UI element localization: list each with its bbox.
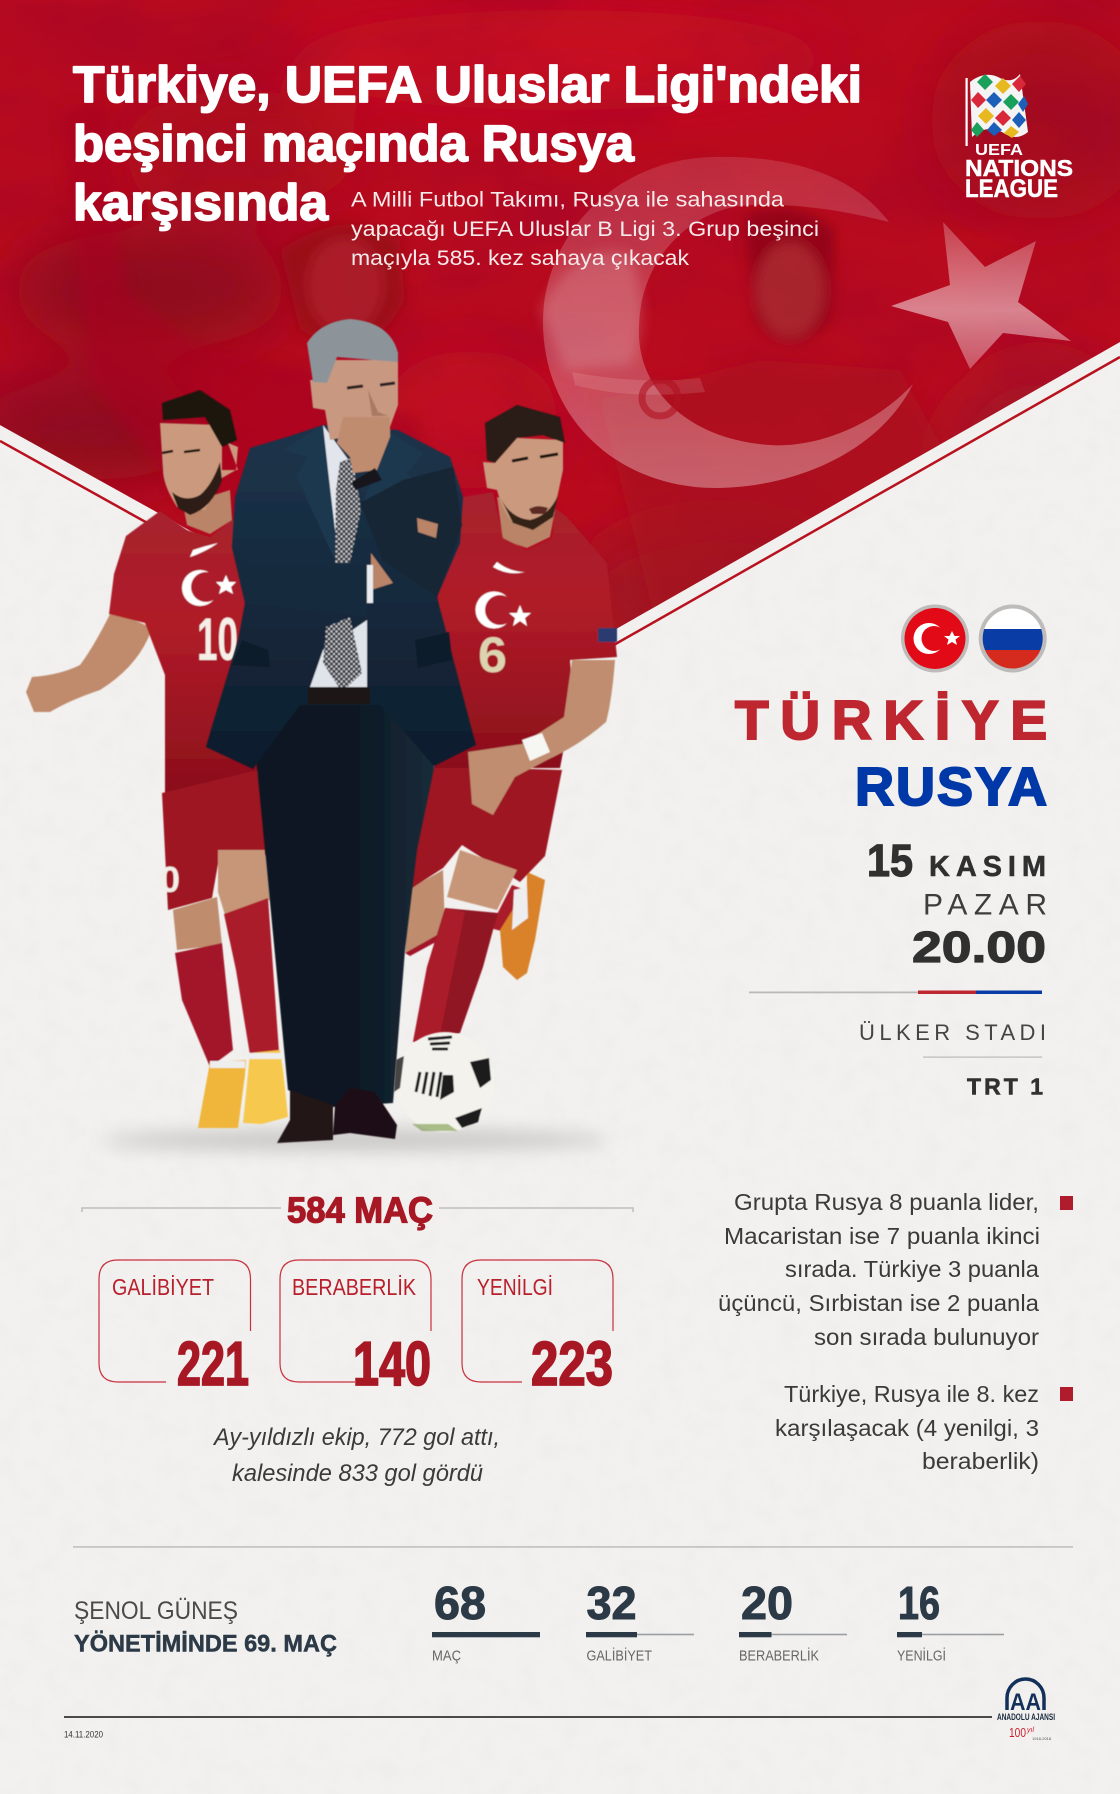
coach stat: draws: BERABERLİK [739,1647,819,1665]
group note: Grupta Rusya 8 puanla lider, [734,1189,1039,1215]
subtitle: yapacağı UEFA Uluslar B Ligi 3. Grup beşinci [351,218,819,241]
coach stat: matches: 68 [434,1577,486,1629]
jersey [434,492,617,768]
coach heading: YÖNETİMİNDE 69. MAÇ [74,1631,337,1658]
flag crescent [543,157,913,488]
coach stat: draws: 20 [741,1577,793,1629]
logo: UEFA Nations League [965,74,1073,203]
coach stat: losses: 16 [898,1577,940,1629]
flag star [891,222,1071,369]
head-to-head note: Türkiye, Rusya ile 8. kez [784,1381,1039,1407]
logo: UEFA Nations League: NATIONS [965,155,1073,181]
title: beşinci maçında Rusya [73,115,635,172]
head-to-head note [775,1381,1073,1474]
front leg [447,850,517,910]
coach stat: wins [586,1577,694,1665]
neck and head [483,405,565,548]
stat card: yenilgi: 223 [531,1330,613,1399]
match date and time: KASIM [929,851,1046,883]
coach heading: ŞENOL GÜNEŞ [74,1597,238,1625]
logo: Anadolu Ajansı: ANADOLU AJANSI [997,1712,1055,1722]
stat card: galibiyet: 221 [177,1330,249,1399]
coach stat: wins: GALİBİYET [586,1647,652,1665]
coach stat: draws [739,1577,847,1665]
goals note: kalesinde 833 gol gördü [232,1460,483,1487]
subtitle [351,188,819,270]
head-to-head note: karşılaşacak (4 yenilgi, 3 [775,1415,1039,1441]
jersey [109,511,262,795]
faded crowd players [74,140,944,610]
shoes [277,1090,333,1143]
shorts [406,766,562,892]
watch [352,468,382,490]
goals note: Ay-yıldızlı ekip, 772 gol attı, [212,1424,500,1451]
boots [198,1060,246,1128]
head [160,390,238,534]
photo: player number 6: 6 [478,627,507,683]
broadcaster: TRT 1 [967,1074,1043,1100]
all-time record heading [82,1190,633,1231]
tri-colour divider [749,990,1042,994]
coach stat: wins: 32 [586,1577,636,1629]
match date and time: 20.00 [912,923,1046,972]
title [73,56,862,231]
diagonal red rule right [612,357,1120,646]
stat card: beraberlik [280,1260,431,1399]
arm left [26,610,152,712]
legs [173,897,222,950]
photo: coach Şenol Güneş [206,319,476,1143]
photo: player number 10: 0 [160,859,180,900]
coach stat: matches [432,1577,540,1665]
photo: player number 10: 10 [197,606,238,673]
match date and time: PAZAR [923,888,1047,922]
photo: player number 10 [26,390,288,1128]
venue: ÜLKER STADI [859,1020,1046,1045]
photo: player number 6 [405,405,617,1042]
boot [500,872,545,980]
head [307,319,398,473]
trousers [250,695,440,1107]
coach stat: matches: MAÇ [432,1649,461,1665]
bullet [1060,1387,1073,1401]
pockets [232,640,270,667]
stat card: beraberlik: 140 [353,1330,431,1399]
shirt [310,425,367,687]
coach stat: losses [897,1577,1004,1665]
logo: Anadolu Ajansı: yıl [1026,1727,1034,1734]
subtitle: A Milli Futbol Takımı, Rusya ile sahasında [351,188,784,212]
icon: Turkey flag [901,604,969,672]
arm [468,660,615,815]
flags [901,604,1047,674]
subtitle: maçıyla 585. kez sahaya çıkacak [351,247,690,270]
lapels [283,425,340,560]
group note: üçüncü, Sırbistan ise 2 puanla [718,1290,1039,1316]
team names [735,689,1047,817]
shorts [162,770,270,910]
team names: RUSYA [855,757,1047,817]
group note [718,1189,1073,1350]
logo: UEFA Nations League: UEFA [975,142,1023,159]
belt [308,687,370,704]
date: 14.11.2020 [64,1730,103,1741]
back leg [405,870,445,953]
logo: UEFA Nations League: LEAGUE [965,175,1058,203]
red flag banner with crowd photo [0,0,1120,629]
stat card: beraberlik: BERABERLİK [292,1274,417,1300]
logo: Anadolu Ajansı [997,1679,1055,1741]
all-time record heading: 584 MAÇ [287,1190,433,1231]
logo: Anadolu Ajansı: 100 [1009,1725,1026,1740]
team names: TÜRKİYE [735,689,1047,751]
stat card: galibiyet: GALİBİYET [112,1274,214,1300]
logo: Anadolu Ajansı: 1918-2018 [1032,1736,1052,1741]
sleeves [232,547,367,617]
logo: Anadolu Ajansı: AA [1010,1689,1041,1716]
coach stat: losses: YENİLGİ [897,1647,946,1665]
head-to-head note: beraberlik) [922,1448,1039,1474]
goals note [212,1424,500,1487]
group note: sırada. Türkiye 3 puanla [785,1256,1039,1282]
football [394,1032,495,1132]
icon: Russia flag [979,604,1047,674]
bullet [1060,1196,1073,1210]
tie [323,458,362,692]
group note: Macaristan ise 7 puanla ikinci [724,1223,1040,1249]
jacket [206,425,476,769]
diagonal red rule left [0,441,160,530]
match date and time: 15 [867,835,913,886]
coach heading [74,1597,337,1658]
match date and time [867,835,1047,972]
stat card: galibiyet [99,1260,250,1399]
stat card: yenilgi: YENİLGİ [477,1274,553,1300]
hands and cuff [367,518,438,603]
group note: son sırada bulunuyor [814,1324,1039,1350]
stat card: yenilgi [462,1260,613,1399]
title: Türkiye, UEFA Uluslar Ligi'ndeki [73,56,862,113]
ground shadow [100,1130,610,1150]
title: karşısında [73,174,329,231]
